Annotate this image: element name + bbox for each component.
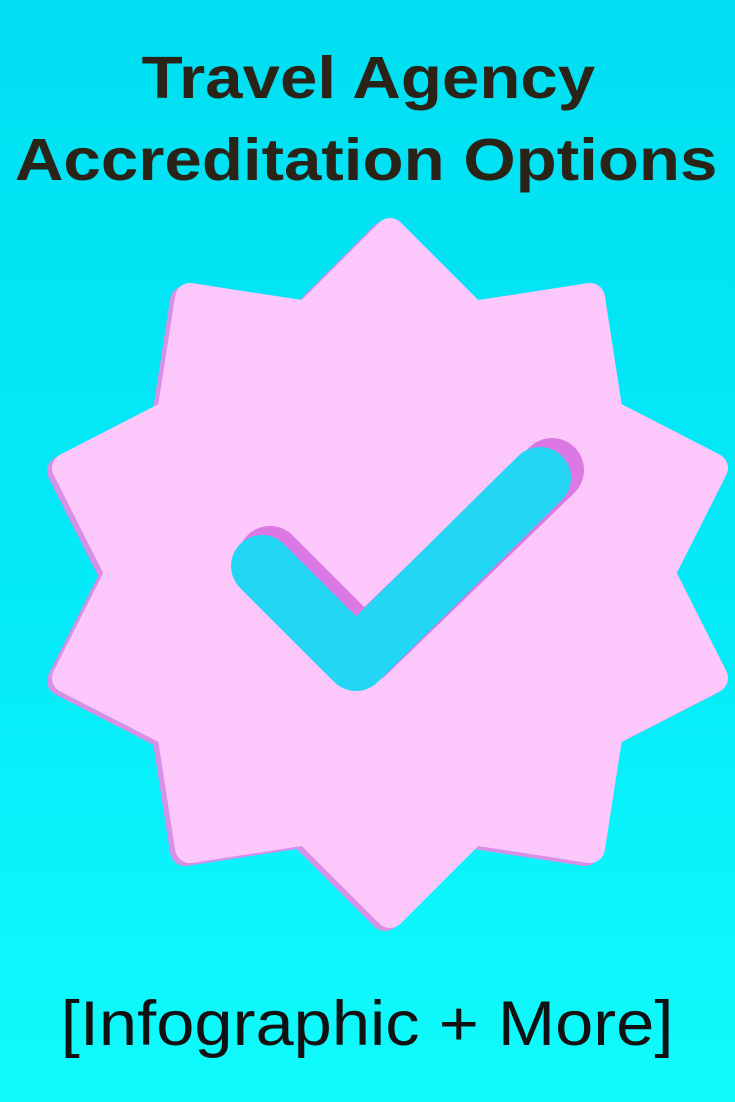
icon: checkmark cutout <box>262 470 552 660</box>
title <box>15 45 717 193</box>
subtitle: [Infographic + More] <box>61 989 673 1059</box>
title: Travel Agency <box>142 45 595 111</box>
star <box>67 233 713 913</box>
star shadow <box>62 236 708 916</box>
title: Accreditation Options <box>15 127 717 193</box>
